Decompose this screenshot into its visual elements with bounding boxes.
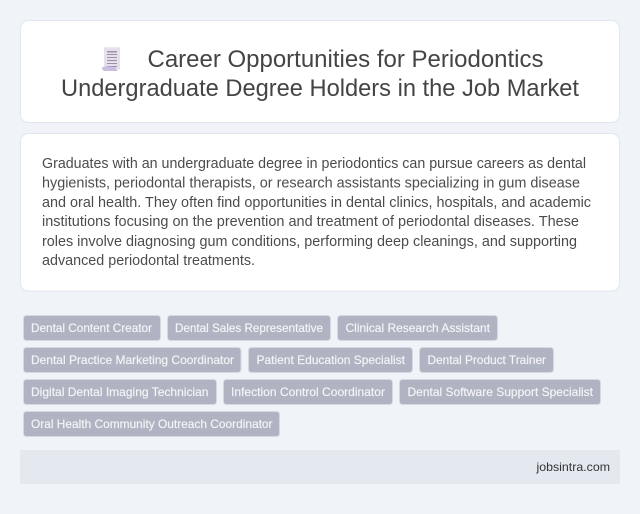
panel: career tags <box>24 316 600 436</box>
tag: Dental Product Trainer <box>420 348 554 372</box>
description text <box>42 155 591 269</box>
tag: Patient Education Specialist: Patient Education Specialist <box>256 353 406 367</box>
tag: Clinical Research Assistant: Clinical Research Assistant <box>346 321 491 335</box>
tag: Infection Control Coordinator: Infection Control Coordinator <box>231 385 385 399</box>
footer source text: jobsintra.com <box>535 460 610 474</box>
description text: roles involve diagnosing gum conditions, performing deep cleanings, and supporting <box>42 233 577 250</box>
panel: description <box>20 134 620 291</box>
tag: Oral Health Community Outreach Coordinator: Oral Health Community Outreach Coordinator <box>31 417 272 431</box>
tag: Dental Product Trainer: Dental Product Trainer <box>428 353 546 367</box>
tag: Dental Software Support Specialist: Dental Software Support Specialist <box>408 385 594 399</box>
description text: Graduates with an undergraduate degree in periodontics can pursue careers as dental <box>42 155 586 172</box>
tag: Clinical Research Assistant <box>338 316 498 340</box>
tag: Dental Practice Marketing Coordinator <box>24 348 241 372</box>
tag: Dental Software Support Specialist <box>400 380 600 404</box>
panel: title card <box>20 20 620 122</box>
tag: Oral Health Community Outreach Coordinator <box>24 412 280 436</box>
tag: Dental Sales Representative: Dental Sales Representative <box>175 321 323 335</box>
tag: Digital Dental Imaging Technician: Digital Dental Imaging Technician <box>31 385 208 399</box>
tag: Patient Education Specialist <box>248 348 412 372</box>
description text: institutions focusing on the prevention and treatment of periodontal diseases. These <box>42 213 579 230</box>
tag: Dental Practice Marketing Coordinator: Dental Practice Marketing Coordinator <box>31 353 234 367</box>
title text: Undergraduate Degree Holders in the Job Market <box>61 75 579 102</box>
footer bar <box>20 450 620 484</box>
title text <box>61 46 579 102</box>
tag: Dental Content Creator: Dental Content Creator <box>31 321 152 335</box>
tag: Infection Control Coordinator <box>224 380 392 404</box>
tag: Dental Content Creator <box>24 316 160 340</box>
icon: document scroll <box>102 47 120 71</box>
tag: Dental Sales Representative <box>168 316 330 340</box>
description text: hygienists, periodontal therapists, or research assistants specializing in gum disease <box>42 174 580 192</box>
description text: advanced periodontal treatments. <box>42 252 255 269</box>
tag: Digital Dental Imaging Technician <box>24 380 216 404</box>
title text: Career Opportunities for Periodontics <box>148 46 544 73</box>
description text: and oral health. They often find opportunities in dental clinics, hospitals, and academic <box>42 194 591 211</box>
